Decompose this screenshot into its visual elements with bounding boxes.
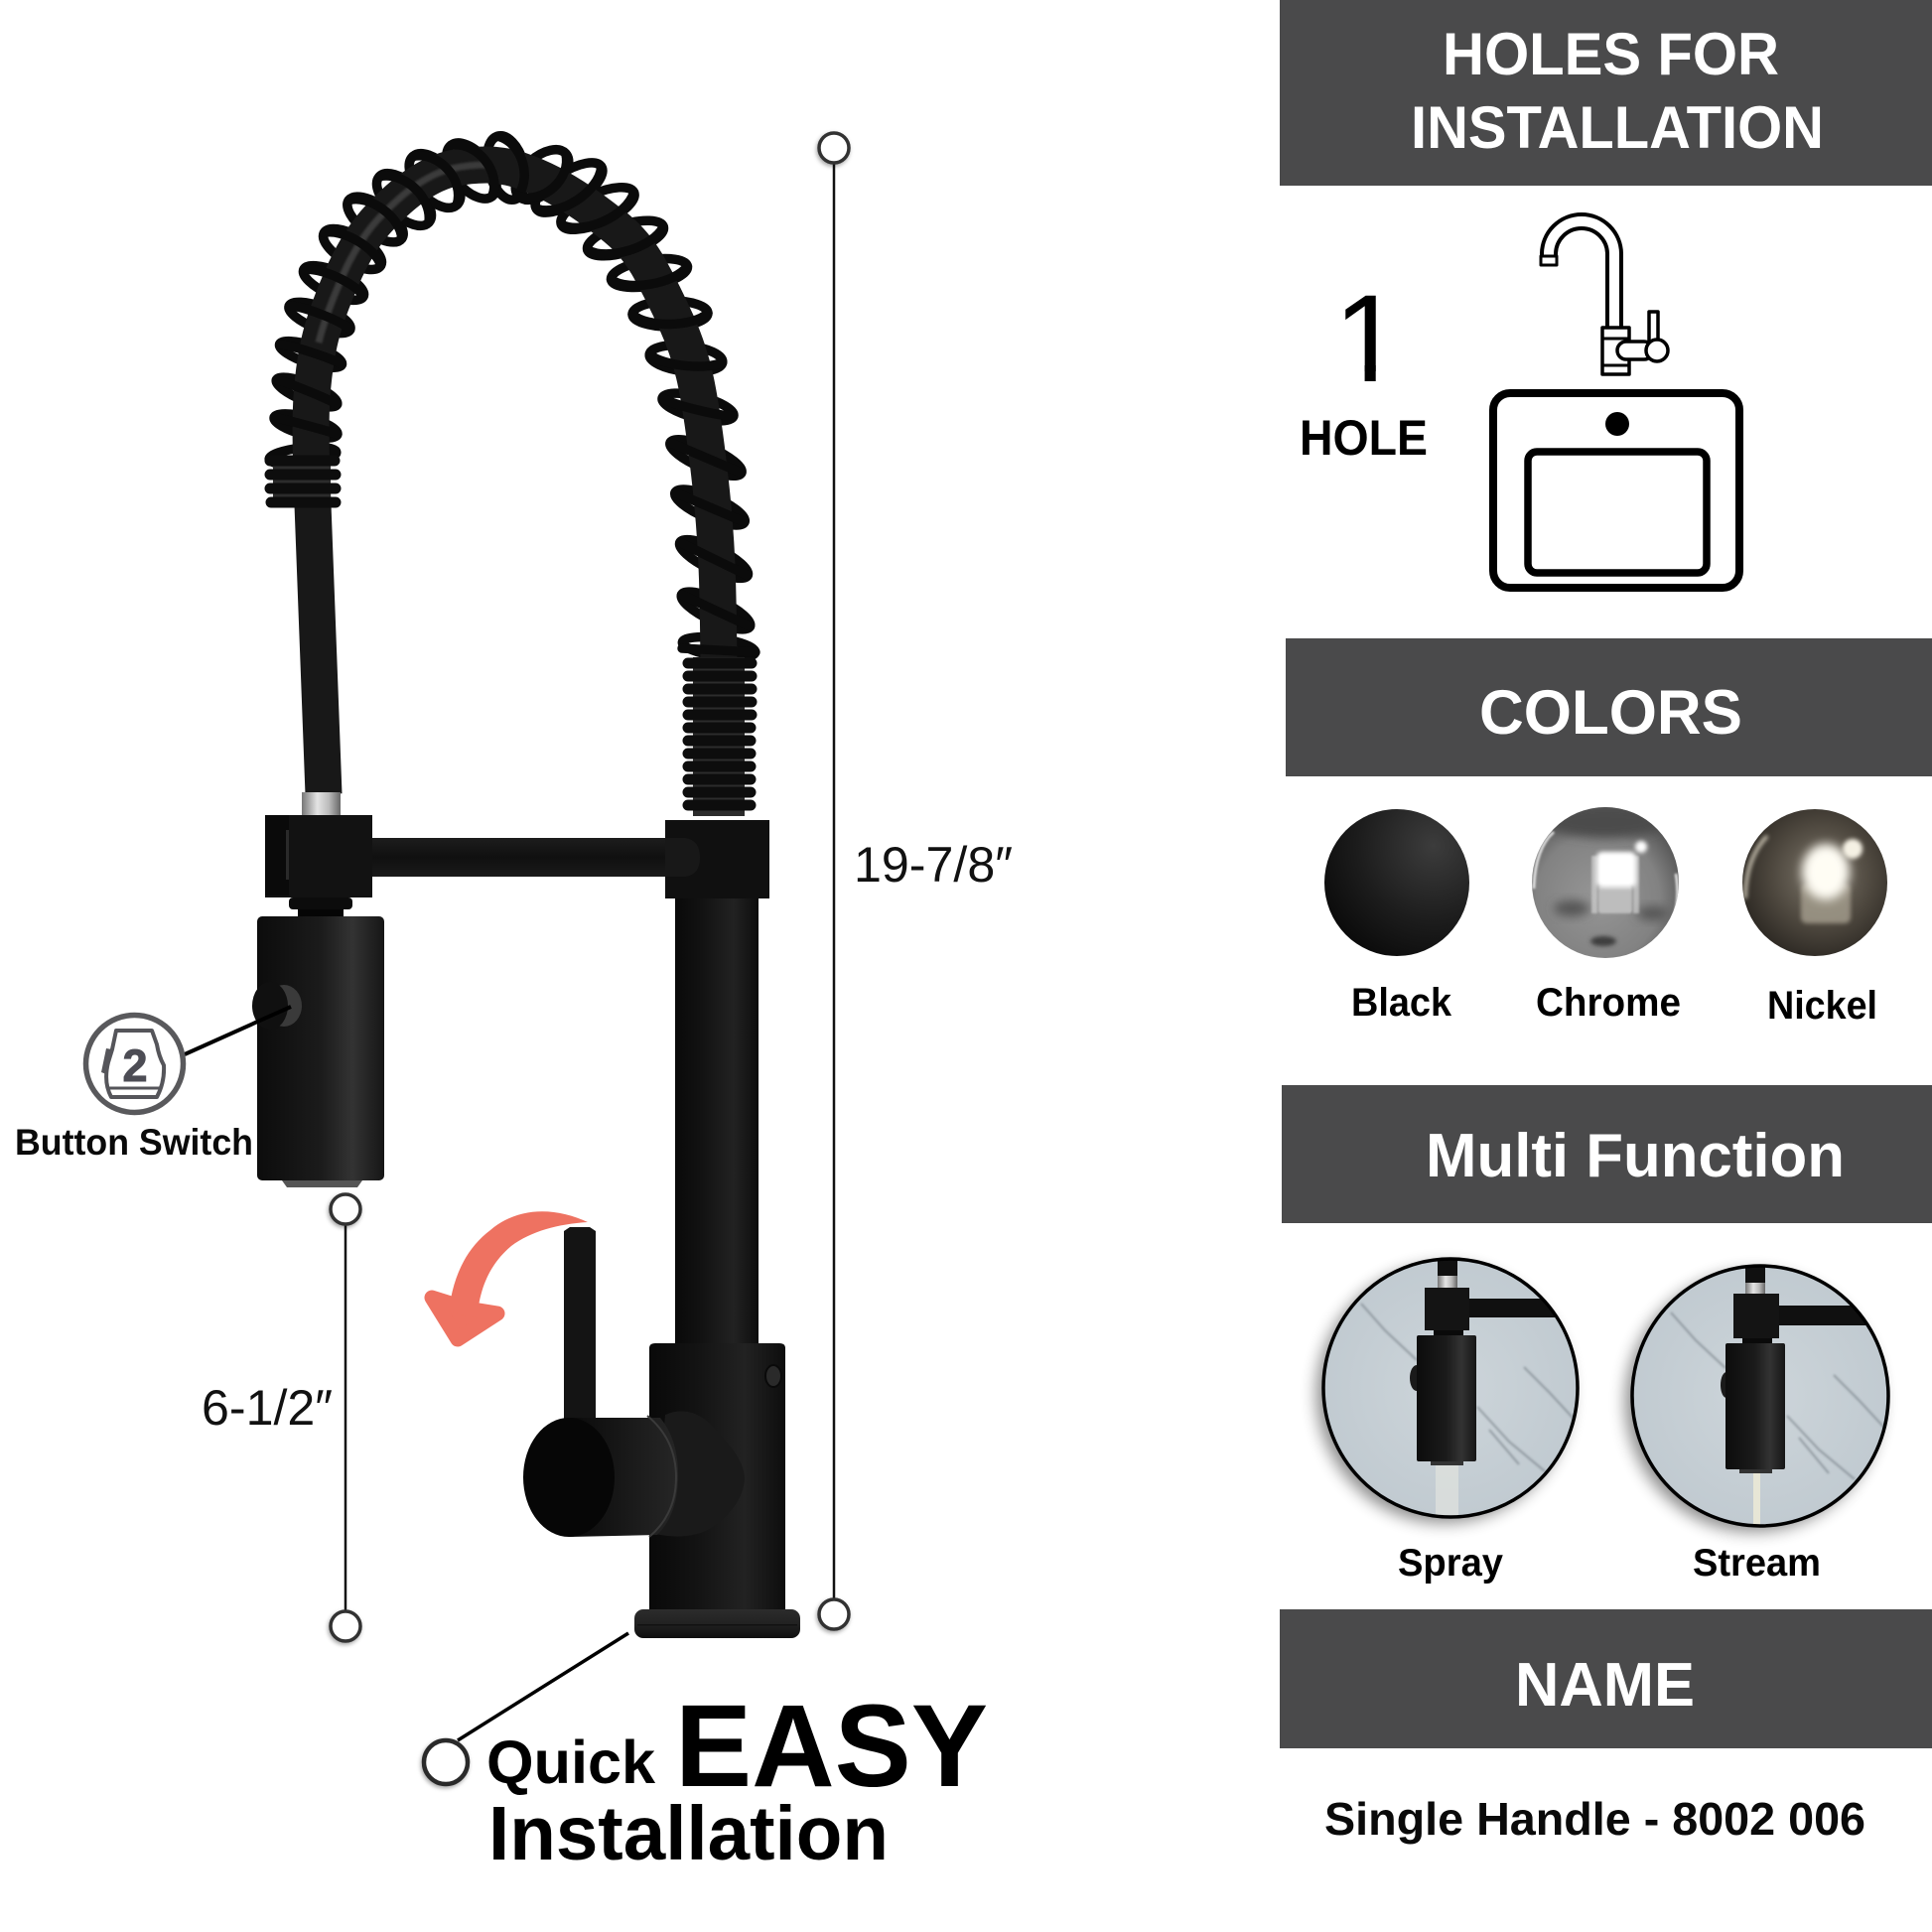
icon: faucet outline bbox=[1541, 221, 1668, 374]
heading banner: name bbox=[1280, 1609, 1932, 1748]
heading banner: multi function: Multi Function bbox=[1426, 1122, 1845, 1190]
pole collar bbox=[665, 820, 769, 898]
panel: name bbox=[1280, 1609, 1932, 1845]
pull-down hose bbox=[311, 165, 719, 816]
handle hub dome bbox=[655, 1411, 745, 1537]
lever handle bbox=[564, 1227, 596, 1430]
icon: sink bbox=[1493, 393, 1739, 588]
callout: quick easy installation: Quick bbox=[486, 1728, 655, 1796]
callout: button switch: Button Switch bbox=[15, 1122, 253, 1163]
callout: button switch: 2 bbox=[122, 1040, 148, 1091]
swatch: black bbox=[1324, 809, 1469, 1025]
chrome ring bbox=[302, 792, 341, 815]
dimension: 19-7/8 height bbox=[819, 133, 1013, 1629]
mode: stream bbox=[1625, 1263, 1888, 1585]
hole count: 1 bbox=[1333, 270, 1403, 408]
red rotation arrow bbox=[432, 1211, 588, 1339]
base flange bbox=[634, 1609, 800, 1638]
heading banner: colors: COLORS bbox=[1479, 678, 1742, 748]
valve body bbox=[649, 1343, 785, 1614]
horizontal arm bbox=[367, 838, 675, 877]
sprayer button bbox=[252, 982, 302, 1030]
spring coils: front arcs bbox=[274, 132, 756, 652]
heading banner: holes: HOLES FOR bbox=[1443, 21, 1779, 87]
swatch: nickel bbox=[1742, 809, 1887, 1028]
product name: Single Handle - 8002 006 bbox=[1324, 1793, 1865, 1845]
dimension: 6-1/2 reach bbox=[202, 1194, 360, 1641]
mode: spray bbox=[1316, 1256, 1578, 1585]
swatch: nickel: Nickel bbox=[1767, 984, 1877, 1028]
heading banner: colors bbox=[1286, 638, 1932, 776]
swatch: chrome: Chrome bbox=[1536, 981, 1681, 1025]
callout: quick easy installation: Installation bbox=[488, 1791, 889, 1876]
heading banner: multi function bbox=[1282, 1085, 1932, 1223]
callout: quick easy installation bbox=[424, 1633, 988, 1876]
callout: quick easy installation: EASY bbox=[675, 1681, 988, 1812]
hole count bbox=[1303, 296, 1426, 455]
head block bbox=[265, 815, 372, 917]
heading banner: name: NAME bbox=[1515, 1651, 1695, 1720]
pole bbox=[675, 898, 759, 1345]
hole count: HOLE bbox=[1300, 410, 1428, 466]
swatch: black: Black bbox=[1351, 981, 1452, 1025]
arm elbow bbox=[665, 838, 700, 877]
panel: multi function bbox=[1282, 1085, 1932, 1585]
spring coils: rear arcs bbox=[268, 131, 757, 661]
callout: button switch bbox=[15, 1007, 291, 1163]
dense left coil bbox=[270, 457, 336, 506]
sprayer wand bbox=[257, 916, 384, 1187]
faucet product illustration bbox=[252, 131, 800, 1638]
dimension: 6-1/2 reach: 6-1/2″ bbox=[202, 1380, 333, 1436]
panel: holes for installation bbox=[1280, 0, 1932, 588]
heading banner: holes bbox=[1280, 0, 1932, 186]
mode: stream: Stream bbox=[1693, 1542, 1821, 1585]
swatch: chrome bbox=[1532, 806, 1681, 1025]
dimension: 19-7/8 height: 19-7/8″ bbox=[854, 837, 1013, 893]
handle cylinder bbox=[523, 1416, 678, 1537]
mode: spray: Spray bbox=[1398, 1542, 1503, 1585]
panel: colors bbox=[1286, 638, 1932, 1028]
dense right coil bbox=[688, 657, 752, 816]
heading banner: holes: INSTALLATION bbox=[1411, 94, 1824, 161]
